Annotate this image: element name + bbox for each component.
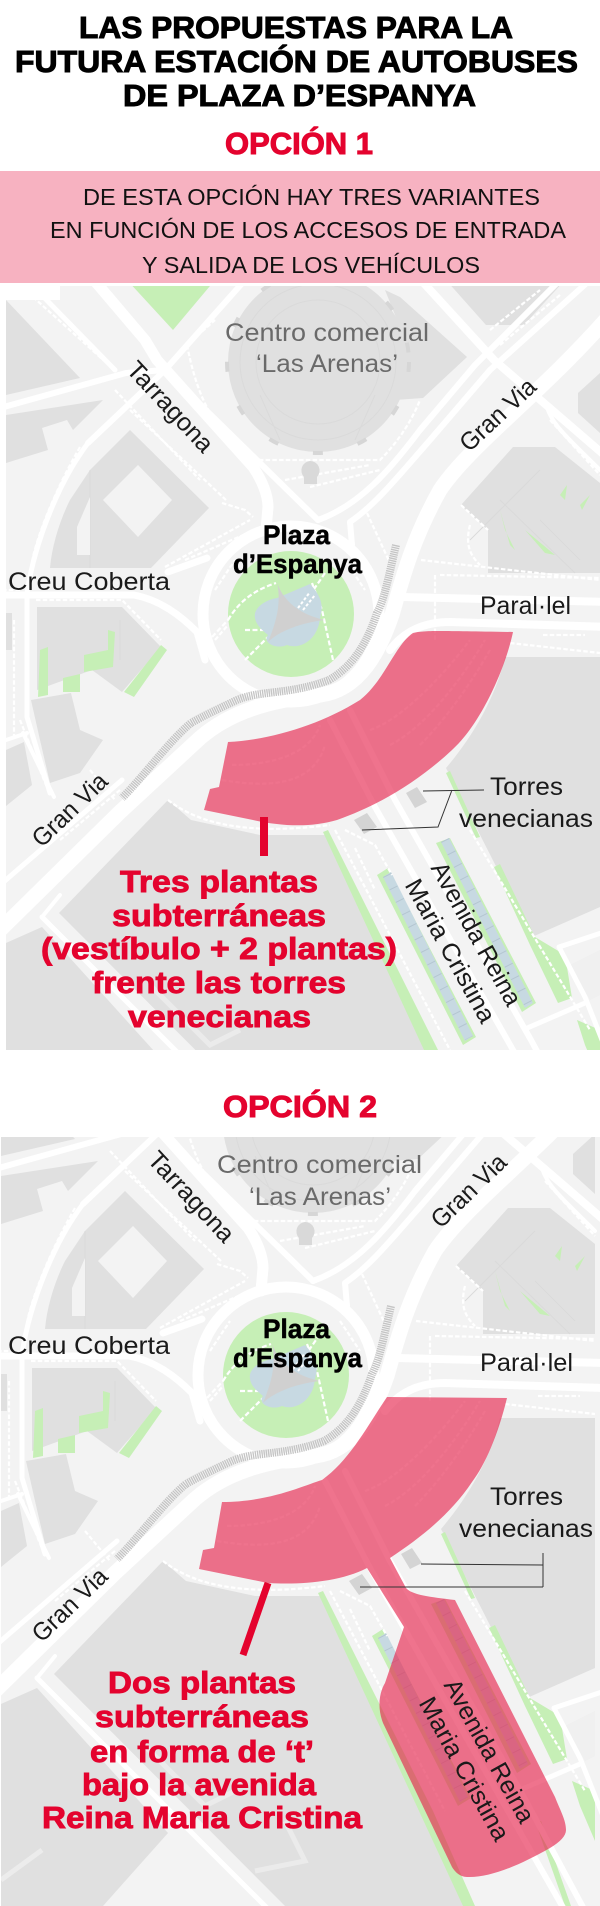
callout text 1: Tres plantas: [120, 864, 318, 899]
las arenas perimeter tabs: [227, 271, 409, 453]
title: [15, 10, 578, 113]
labels map 2: Centro comercial: [217, 1151, 422, 1179]
labels map 2: Tarragona: [142, 1146, 240, 1248]
callout text 2: Reina Maria Cristina: [42, 1800, 363, 1835]
panel: opción 1 note: Y SALIDA DE LOS VEHÍCULOS: [142, 252, 480, 278]
labels map 2: [8, 1146, 593, 1846]
building detail strips: [150, 985, 310, 1110]
callout text 2: bajo la avenida: [82, 1767, 317, 1802]
labels map 1: ‘Las Arenas’: [256, 350, 398, 378]
panel: opción 1 note: [0, 171, 600, 283]
towers: [354, 787, 427, 834]
leader lines map 2: [360, 1553, 543, 1587]
labels map 1: Gran Via: [454, 373, 542, 457]
panel: opción 1 note: EN FUNCIÓN DE LOS ACCESOS DE ENTRADA: [50, 217, 566, 243]
plaza park: [228, 551, 354, 677]
labels map 1: Plaza: [263, 520, 331, 550]
callout text 2: en forma de ‘t’: [90, 1734, 314, 1769]
labels map 2: Maria Cristina: [413, 1692, 515, 1846]
labels map 1: Creu Coberta: [8, 568, 170, 596]
labels map 2: Creu Coberta: [8, 1332, 170, 1360]
title: DE PLAZA D’ESPANYA: [123, 78, 476, 113]
water strips: [383, 838, 533, 1041]
callout text 1: venecianas: [128, 999, 311, 1034]
leader lines map 1: [362, 790, 484, 830]
labels map 1: Maria Cristina: [399, 874, 501, 1028]
heading: opción 2: OPCIÓN 2: [223, 1088, 377, 1124]
labels map 2: d’Espanya: [233, 1343, 363, 1373]
labels map 1: [8, 319, 593, 1028]
labels map 1: venecianas: [459, 805, 593, 833]
labels map 2: ‘Las Arenas’: [249, 1183, 391, 1211]
labels map 1: Centro comercial: [225, 319, 429, 347]
footprint: opción 2: [199, 1397, 566, 1877]
plaza pond: [255, 584, 322, 647]
labels map 2: Plaza: [263, 1314, 331, 1344]
labels map 2: Paral·lel: [480, 1349, 573, 1377]
callout text 1: (vestíbulo + 2 plantas): [41, 931, 397, 966]
callout line 1: [260, 817, 268, 856]
labels map 1: Tarragona: [121, 356, 219, 458]
labels map 1: Torres: [490, 773, 563, 801]
rail strip: [122, 545, 396, 798]
labels map 1: d’Espanya: [233, 549, 363, 579]
callout text 2: Dos plantas: [108, 1665, 296, 1700]
map 2: [1, 1137, 600, 1906]
labels map 2: Gran Via: [26, 1562, 114, 1648]
title: FUTURA ESTACIÓN DE AUTOBUSES: [15, 43, 578, 79]
callout text 1: frente las torres: [92, 965, 346, 1000]
map 1: [6, 286, 600, 1050]
callout text 2: subterráneas: [95, 1699, 309, 1734]
title: LAS PROPUESTAS PARA LA: [79, 10, 513, 45]
labels map 2: Gran Via: [425, 1148, 513, 1234]
callout text 1: [41, 864, 397, 1034]
plaza monument: [268, 582, 325, 642]
labels map 2: Avenida Reina: [438, 1674, 540, 1828]
footprint: opción 1: [204, 631, 513, 825]
labels map 1: Paral·lel: [480, 592, 571, 620]
labels map 1: Avenida Reina: [425, 857, 527, 1011]
labels map 2: venecianas: [459, 1515, 593, 1543]
labels map 1: Gran Via: [26, 767, 114, 853]
callout text 2: [42, 1665, 363, 1835]
las arenas fountain: [301, 461, 320, 484]
labels map 2: Torres: [490, 1483, 563, 1511]
panel: opción 1 note: DE ESTA OPCIÓN HAY TRES VARIANTES: [83, 184, 540, 210]
callout line 2: [243, 1583, 268, 1655]
heading: opción 1: OPCIÓN 1: [225, 125, 373, 161]
callout text 1: subterráneas: [112, 898, 326, 933]
